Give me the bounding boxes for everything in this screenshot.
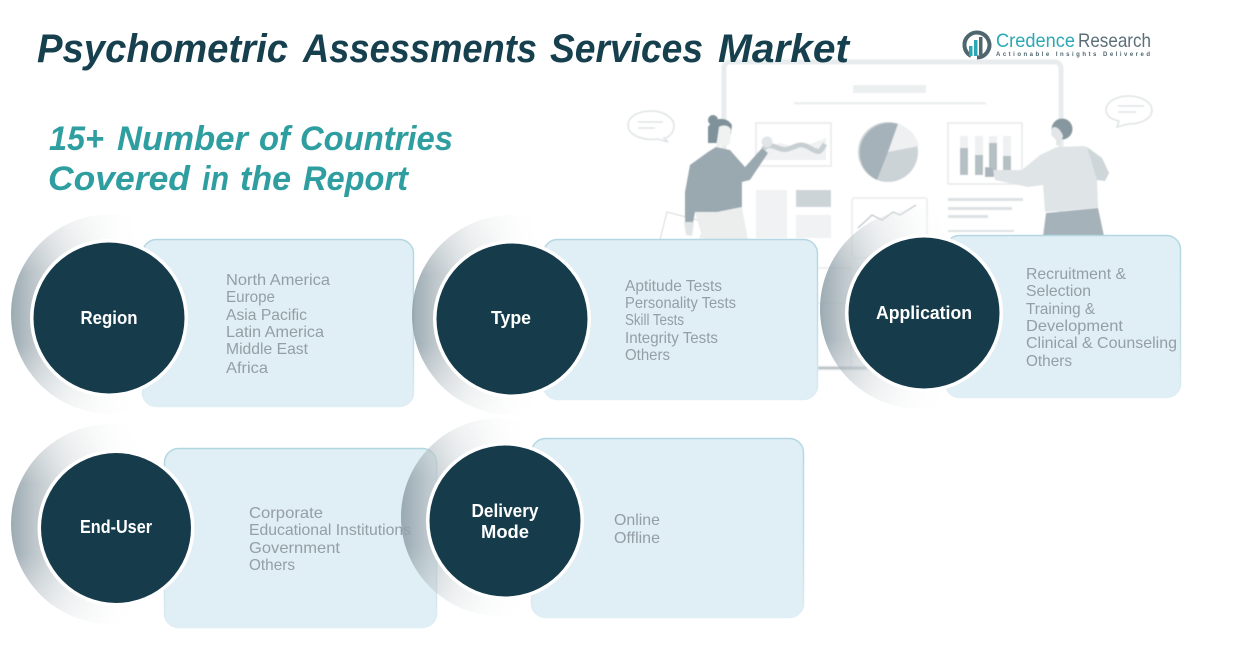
End-User list: Others: [249, 557, 295, 574]
monitor base line: [818, 367, 866, 369]
Region list: Asia Pacific: [226, 307, 307, 324]
title: Assessments: [302, 27, 537, 71]
Region list: Middle East: [226, 341, 309, 358]
logo wordmark: Credence: [996, 30, 1075, 52]
Type list: Personality Tests: [625, 295, 736, 312]
badge: End-User: [11, 427, 194, 618]
panel: Application: [946, 236, 1180, 398]
woman figure: [660, 115, 772, 240]
badge: Type: Type: [491, 308, 531, 328]
subtitle: Countries: [300, 120, 453, 158]
background illustration: analysts presenting charts: [628, 62, 1152, 369]
Application list: Development: [1026, 318, 1124, 335]
line chart card: [852, 198, 927, 258]
badge: Region: Region: [80, 308, 138, 328]
Type list: Integrity Tests: [625, 330, 718, 347]
logo icon: [964, 33, 989, 58]
badge: Application: [820, 214, 1003, 404]
subtitle: in: [202, 160, 229, 198]
Type list: Aptitude Tests: [625, 278, 722, 295]
subtitle: 15+: [49, 120, 104, 158]
monitor header: [794, 85, 986, 104]
Delivery Mode list: [614, 512, 660, 547]
badge: Delivery Mode: Delivery: [472, 501, 538, 521]
title: [37, 27, 851, 71]
badge: End-User: End-User: [80, 517, 152, 537]
End-User list: [249, 505, 411, 574]
End-User list: Educational Institutions: [249, 522, 411, 539]
Region list: Africa: [226, 360, 268, 377]
Region list: Europe: [226, 289, 275, 306]
stacked bar chart card: [948, 123, 1022, 184]
title: Psychometric: [37, 27, 288, 71]
badge: Application: Application: [876, 303, 972, 323]
Delivery Mode list: Online: [614, 512, 660, 529]
Application list: Recruitment &: [1026, 266, 1126, 283]
area chart card: [756, 123, 831, 166]
badge: Region: [11, 217, 188, 408]
man figure: [985, 118, 1109, 236]
Application list: Clinical & Counseling: [1026, 335, 1177, 352]
logo: Credence Research: [964, 30, 1151, 58]
subtitle: Number: [117, 120, 250, 158]
subtitle: Covered: [48, 160, 191, 198]
panel: Type: [544, 240, 818, 400]
title: Services: [550, 27, 703, 71]
Type list: [625, 278, 736, 364]
text lines: [948, 198, 1023, 232]
Region list: Latin America: [226, 324, 324, 341]
logo wordmark second word: Research: [1078, 30, 1151, 52]
End-User list: Government: [249, 540, 341, 557]
speech bubble right: [1106, 96, 1152, 127]
title: Market: [718, 27, 851, 71]
pie chart: [858, 122, 919, 182]
dashboard blocks: [756, 190, 831, 238]
badge: Type: [412, 218, 591, 409]
speech bubble left: [628, 111, 674, 142]
subtitle: Report: [303, 160, 410, 198]
Delivery Mode list: Offline: [614, 530, 660, 547]
Region list: North America: [226, 272, 330, 289]
Type list: Skill Tests: [625, 312, 684, 329]
End-User list: Corporate: [249, 505, 323, 522]
monitor lower grid: [818, 268, 851, 368]
Application list: [1026, 266, 1177, 370]
panel: Delivery Mode: [532, 438, 804, 618]
badge: Delivery Mode: Mode: [481, 522, 529, 542]
subtitle: [48, 120, 453, 198]
panel: End-User: [164, 448, 436, 628]
Application list: Training &: [1026, 301, 1095, 318]
badge: Delivery Mode: [401, 421, 584, 610]
monitor frame: [724, 62, 1061, 368]
Region list: [226, 272, 330, 377]
Type list: Others: [625, 347, 670, 364]
subtitle: of: [259, 120, 294, 158]
panel: Region: [142, 240, 414, 406]
logo tagline: Actionable Insights Delivered: [996, 52, 1150, 58]
Application list: Selection: [1026, 283, 1091, 300]
Application list: Others: [1026, 353, 1072, 370]
subtitle: the: [240, 160, 291, 198]
